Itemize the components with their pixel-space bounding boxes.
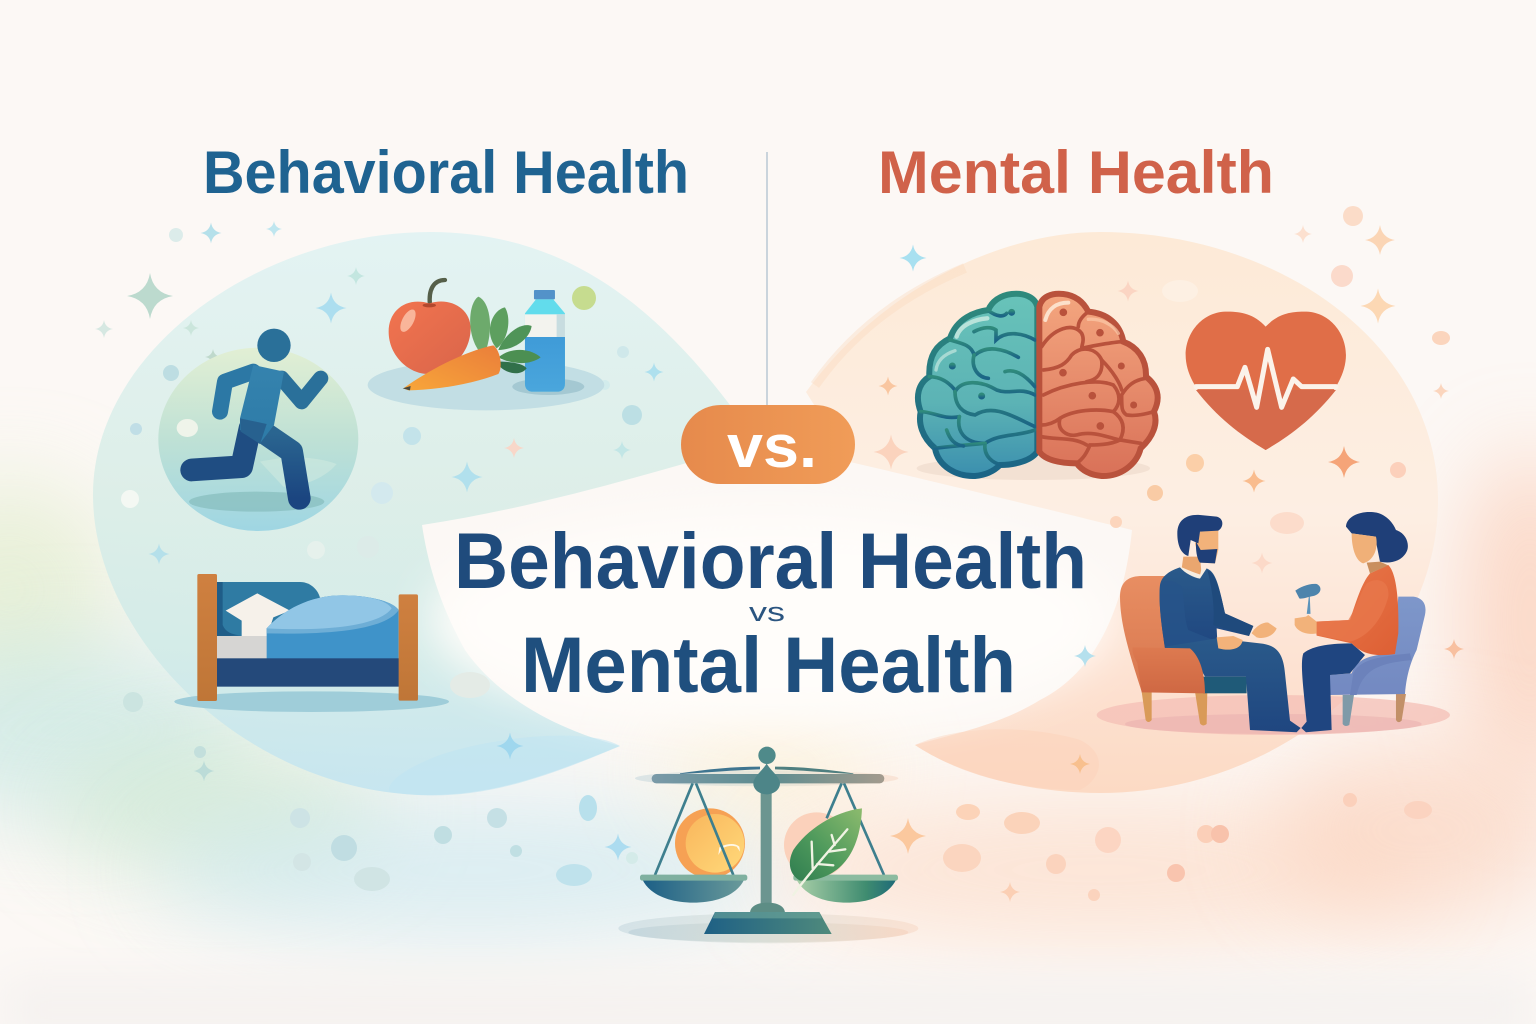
carrot <box>403 297 541 390</box>
icon: balance scale <box>618 747 918 943</box>
apple <box>389 280 471 374</box>
scene: therapy session <box>1097 512 1450 735</box>
armchair: left back <box>1120 576 1247 725</box>
decorative sparkles and dots: left <box>95 221 664 891</box>
coin <box>675 808 745 878</box>
icon: brain <box>917 294 1158 480</box>
decorative sparkles and dots: right <box>874 206 1464 902</box>
icon: healthy food and water <box>368 280 604 410</box>
pink circle behind leaf <box>784 812 849 878</box>
central white area <box>430 515 1110 725</box>
right pan <box>793 875 898 903</box>
person: man <box>1160 515 1301 732</box>
armchair: right <box>1328 597 1426 726</box>
center divider <box>766 152 768 406</box>
icon: heart with pulse <box>1186 312 1346 450</box>
brain: left hemisphere <box>918 294 1037 476</box>
panel: mental bubble <box>806 232 1438 793</box>
main title: vs <box>749 597 785 627</box>
person: woman <box>1295 512 1408 732</box>
leaf <box>790 808 862 895</box>
left pan <box>640 875 747 903</box>
main title: Mental Health <box>521 620 1016 709</box>
panel: behavioral bubble <box>93 232 730 795</box>
heading: Behavioral Health: Behavioral Health <box>203 139 689 206</box>
main title <box>454 516 1087 709</box>
icon: runner <box>158 329 358 531</box>
heading: Mental Health: Mental Health <box>878 139 1274 206</box>
armchair: left front arm <box>1132 647 1205 693</box>
icon: bed <box>174 574 449 712</box>
stand <box>652 747 884 934</box>
vs badge <box>681 405 855 484</box>
brain: right hemisphere <box>1039 294 1158 476</box>
water bottle <box>525 290 565 392</box>
main title: Behavioral Health <box>454 516 1087 605</box>
vs badge: vs. <box>727 413 817 480</box>
